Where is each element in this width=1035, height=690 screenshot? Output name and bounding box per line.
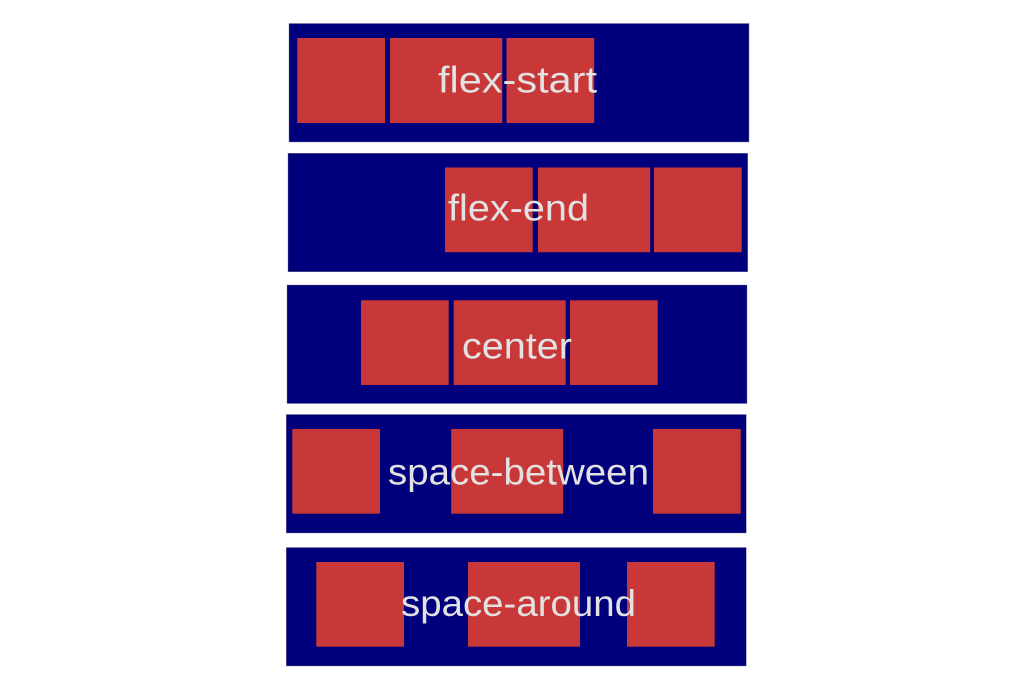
label: center: center bbox=[462, 326, 572, 366]
panel: space-around bbox=[286, 548, 746, 666]
label: flex-end: flex-end bbox=[448, 188, 589, 228]
panel: center bbox=[287, 285, 747, 404]
panel: flex-start bbox=[289, 24, 749, 142]
label: space-around: space-around bbox=[401, 583, 636, 624]
panel: space-between bbox=[286, 414, 746, 533]
label: flex-start: flex-start bbox=[438, 60, 598, 100]
panel: flex-end bbox=[288, 153, 748, 272]
label: space-between: space-between bbox=[388, 452, 649, 492]
